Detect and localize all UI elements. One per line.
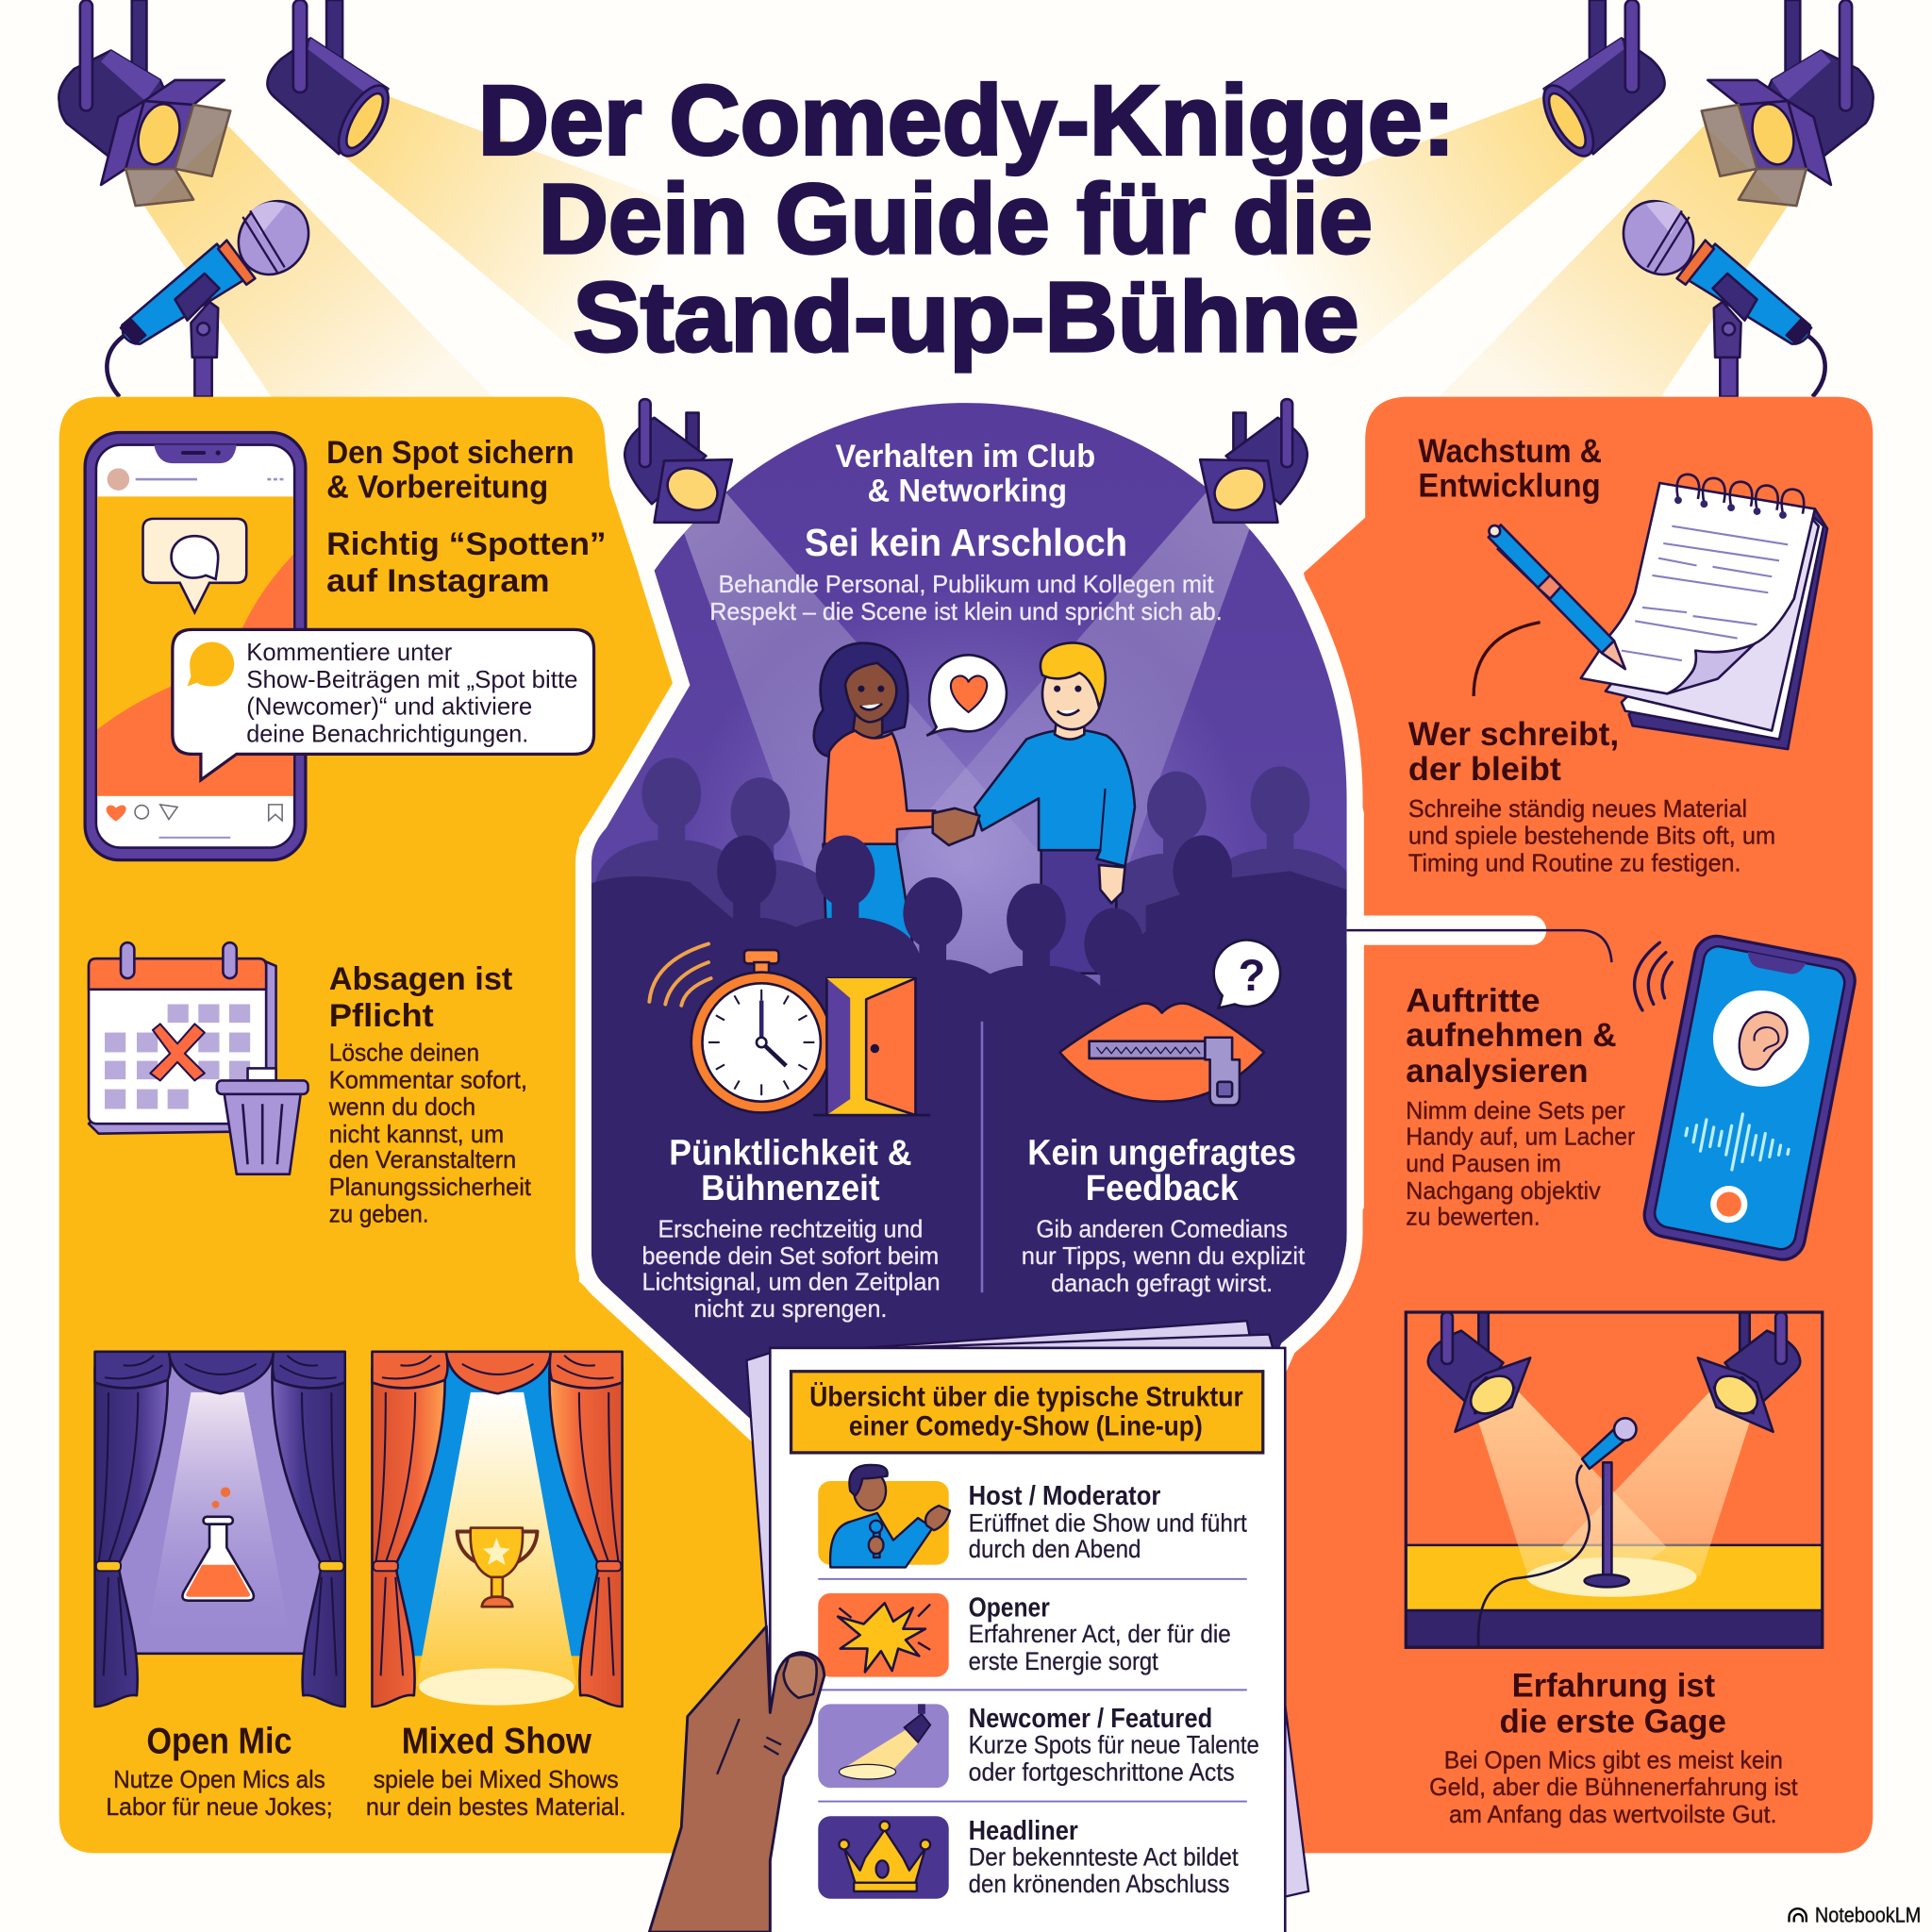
- icon: door: [813, 978, 930, 1115]
- text block: Absagen ist Pflicht: [328, 961, 532, 1228]
- text block: Auftritte aufnehmen & analysieren: zu bewerten.: [1406, 1202, 1541, 1230]
- stage: Mixed Show curtain: [372, 1352, 623, 1707]
- people shaking hands: [814, 642, 1135, 986]
- text block: Sei kein Arschloch: Respekt – die Scene ist klein und spricht sich ab.: [709, 597, 1223, 625]
- heading: Wachstum & Entwicklung: Wachstum &: [1418, 433, 1602, 470]
- text block: Pünktlichkeit & Bühnenzeit: beende dein Set sofort beim: [641, 1241, 939, 1270]
- text block: Open Mic: Open Mic: [146, 1722, 292, 1762]
- handshake: [933, 808, 979, 845]
- callout: comment instruction: Kommentiere unter: [246, 638, 453, 666]
- text block: Absagen ist Pflicht: Pflicht: [329, 998, 434, 1034]
- text block: Absagen ist Pflicht: wenn du doch: [328, 1092, 475, 1121]
- text block: Wer schreibt, der bleibt: Timing und Routine zu festigen.: [1408, 848, 1741, 876]
- text block: Mixed Show: [366, 1722, 626, 1821]
- text block: Pünktlichkeit & Bühnenzeit: nicht zu sprengen.: [693, 1294, 887, 1323]
- line-up paper stack: [747, 1321, 1308, 1932]
- title: [478, 65, 1456, 373]
- text block: Pünktlichkeit & Bühnenzeit: Bühnenzeit: [701, 1169, 880, 1208]
- text block: Auftritte aufnehmen & analysieren: [1406, 982, 1636, 1230]
- row: Opener: erste Energie sorgt: [969, 1647, 1158, 1675]
- title: Stand-up-Bühne: [573, 262, 1359, 373]
- text block: Kein ungefragtes Feedback: Kein ungefragtes: [1027, 1133, 1296, 1173]
- line-up heading: einer Comedy-Show (Line-up): [849, 1411, 1203, 1442]
- text block: Wer schreibt, der bleibt: Wer schreibt,: [1408, 716, 1619, 753]
- callout: comment instruction: deine Benachrichtigungen.: [246, 719, 528, 747]
- row: Opener: Erfahrener Act, der für die: [969, 1620, 1231, 1648]
- row: Headliner: [818, 1816, 1239, 1899]
- line-up heading: Übersicht über die typische Struktur: [809, 1381, 1243, 1412]
- text block: Pünktlichkeit & Bühnenzeit: Lichtsignal, um den Zeitplan: [641, 1268, 941, 1296]
- heading: Richtig Spotten auf Instagram: Richtig “Spotten”: [326, 526, 607, 562]
- icon: zipped lips: [1059, 1004, 1264, 1106]
- text block: Auftritte aufnehmen & analysieren: Nachgang objektiv: [1406, 1176, 1601, 1205]
- icon: calendar with cross: [89, 942, 276, 1134]
- callout: comment instruction: [173, 629, 594, 780]
- text block: Erfahrung ist die erste Gage: Bei Open Mics gibt es meist kein: [1444, 1745, 1783, 1774]
- text block: Open Mic: Labor für neue Jokes;: [106, 1792, 333, 1821]
- text block: Kein ungefragtes Feedback: [1022, 1133, 1306, 1297]
- text block: Mixed Show: Mixed Show: [402, 1722, 591, 1762]
- decorative pen stroke arc: [1474, 623, 1541, 696]
- stage with microphone illustration: [1406, 1312, 1823, 1647]
- text block: Auftritte aufnehmen & analysieren: und Pausen im: [1406, 1149, 1561, 1177]
- text block: Sei kein Arschloch: Behandle Personal, Publikum und Kollegen mit: [718, 570, 1214, 598]
- row: Host / Moderator: [818, 1465, 1247, 1567]
- text block: Absagen ist Pflicht: zu geben.: [329, 1200, 429, 1228]
- icon: microphone on stand: [1478, 1418, 1637, 1647]
- section heading: Verhalten im Club & Networking: [836, 439, 1095, 509]
- text block: Mixed Show: spiele bei Mixed Shows: [374, 1765, 619, 1793]
- text block: Pünktlichkeit & Bühnenzeit: Erscheine rechtzeitig und: [658, 1214, 923, 1242]
- row: Headliner: Headliner: [969, 1816, 1078, 1846]
- icon: question bubble: ?: [1239, 950, 1265, 1000]
- spotlight with barn doors, top left: [58, 0, 230, 206]
- text block: Wer schreibt, der bleibt: und spiele bestehende Bits oft, um: [1408, 822, 1775, 850]
- icon: pen: [1489, 525, 1625, 669]
- text block: Kein ungefragtes Feedback: Gib anderen Comedians: [1036, 1214, 1288, 1242]
- text block: Absagen ist Pflicht: Absagen ist: [329, 961, 512, 997]
- text block: Mixed Show: nur dein bestes Material.: [366, 1792, 626, 1821]
- woman figure: [814, 643, 935, 986]
- text block: Wer schreibt, der bleibt: der bleibt: [1408, 751, 1561, 788]
- text block: Auftritte aufnehmen & analysieren: aufnehmen &: [1406, 1017, 1617, 1054]
- microphone, left: [107, 188, 323, 397]
- line-up heading: [791, 1372, 1263, 1453]
- text block: Open Mic: Nutze Open Mics als: [113, 1765, 325, 1793]
- text block: Kein ungefragtes Feedback: danach gefragt wirst.: [1051, 1269, 1273, 1297]
- logo: NotebookLM: NotebookLM: [1815, 1904, 1921, 1927]
- crowd back row: [595, 758, 1357, 1306]
- text block: Erfahrung ist die erste Gage: Geld, aber die Bühnenerfahrung ist: [1429, 1773, 1798, 1801]
- section heading: Verhalten im Club & Networking: & Networking: [868, 474, 1067, 509]
- heading: Den Spot sichern & Vorbereitung: & Vorbereitung: [326, 470, 548, 506]
- heading: Den Spot sichern & Vorbereitung: [326, 435, 575, 506]
- text block: Pünktlichkeit & Bühnenzeit: [641, 1133, 941, 1323]
- divider between club tips: [981, 1022, 983, 1292]
- text block: Auftritte aufnehmen & analysieren: Auftritte: [1406, 982, 1541, 1019]
- text block: Erfahrung ist die erste Gage: [1429, 1668, 1798, 1828]
- stage: Open Mic curtain: [95, 1352, 345, 1707]
- text block: Erfahrung ist die erste Gage: die erste Gage: [1500, 1703, 1726, 1740]
- text block: Wer schreibt, der bleibt: [1408, 716, 1775, 876]
- icon: trash can: [217, 1068, 308, 1174]
- row: Host / Moderator: Host / Moderator: [969, 1481, 1160, 1511]
- row: Opener: Opener: [969, 1593, 1050, 1624]
- heading: Wachstum & Entwicklung: Entwicklung: [1418, 467, 1601, 504]
- text block: Absagen ist Pflicht: Kommentar sofort,: [329, 1065, 527, 1093]
- panel: yellow background: [59, 397, 770, 1853]
- callout: comment instruction: Show-Beiträgen mit „Spot bitte: [246, 665, 578, 693]
- text block: Sei kein Arschloch: [709, 521, 1223, 625]
- microphone, right: [1609, 188, 1825, 397]
- icon: trophy: [458, 1528, 537, 1607]
- text block: Open Mic: [106, 1722, 333, 1821]
- title: Der Comedy-Knigge:: [478, 65, 1456, 175]
- heading: Wachstum & Entwicklung: [1418, 433, 1602, 504]
- spotlight with barn doors, top right: [1702, 0, 1874, 206]
- text block: Auftritte aufnehmen & analysieren: Handy auf, um Lacher: [1406, 1122, 1636, 1150]
- text block: Erfahrung ist die erste Gage: Erfahrung ist: [1512, 1668, 1715, 1705]
- spotlight, top left inner: [267, 0, 398, 163]
- heading: Richtig Spotten auf Instagram: [326, 526, 607, 599]
- title: Dein Guide für die: [539, 164, 1373, 275]
- club spotlight right: [1200, 399, 1307, 523]
- spotlight beams behind the title: [144, 96, 1788, 407]
- row: Opener: [818, 1593, 1231, 1677]
- row: Newcomer / Featured: oder fortgeschrittone Acts: [969, 1757, 1235, 1786]
- speech bubble with heart: [926, 655, 1007, 736]
- row: Host / Moderator: Erüffnet die Show und führt: [969, 1509, 1247, 1538]
- callout: comment instruction: (Newcomer)“ und aktiviere: [246, 692, 532, 721]
- spotlight, top right inner: [1534, 0, 1665, 163]
- heading: Den Spot sichern & Vorbereitung: Den Spot sichern: [326, 435, 575, 471]
- text block: Erfahrung ist die erste Gage: am Anfang das wertvoilste Gut.: [1449, 1800, 1776, 1828]
- text block: Wer schreibt, der bleibt: Schreihe ständig neues Material: [1408, 794, 1747, 823]
- row: Headliner: Der bekennteste Act bildet: [969, 1842, 1239, 1871]
- icon: phone with Instagram post: [85, 432, 306, 860]
- panel: purple club section: [591, 403, 1357, 1454]
- text block: Auftritte aufnehmen & analysieren: Nimm deine Sets per: [1406, 1096, 1625, 1124]
- text block: Absagen ist Pflicht: Lösche deinen: [329, 1039, 479, 1067]
- text block: Auftritte aufnehmen & analysieren: analysieren: [1406, 1053, 1589, 1090]
- connector bar between club and growth panel: [1347, 915, 1611, 962]
- text block: Absagen ist Pflicht: den Veranstaltern: [329, 1145, 516, 1174]
- row: Newcomer / Featured: Kurze Spots für neue Talente: [969, 1731, 1259, 1759]
- text block: Kein ungefragtes Feedback: nur Tipps, wenn du explizit: [1022, 1241, 1306, 1270]
- panel: orange background: [1281, 397, 1873, 1853]
- section heading: Verhalten im Club & Networking: Verhalten im Club: [836, 439, 1095, 475]
- text block: Absagen ist Pflicht: Planungssicherheit: [329, 1173, 532, 1201]
- club spotlight left: [625, 399, 732, 523]
- text block: Absagen ist Pflicht: nicht kannst, um: [329, 1120, 504, 1148]
- row: Newcomer / Featured: Newcomer / Featured: [969, 1704, 1212, 1734]
- icon: stopwatch: [649, 943, 832, 1112]
- icon: sound waves: [1635, 942, 1672, 1010]
- icon: question bubble: [1214, 941, 1280, 1008]
- text block: Sei kein Arschloch: Sei kein Arschloch: [805, 521, 1127, 564]
- stage light beams in club: [684, 492, 1249, 985]
- text block: Pünktlichkeit & Bühnenzeit: Pünktlichkeit &: [669, 1133, 912, 1173]
- icon: recording phone: [1641, 932, 1858, 1263]
- row: Newcomer / Featured: [818, 1704, 1259, 1788]
- row: Headliner: den krönenden Abschluss: [969, 1870, 1230, 1898]
- icon: flask: [182, 1487, 254, 1601]
- icon: notepad: [1581, 475, 1827, 749]
- man figure: [974, 642, 1135, 974]
- row: Host / Moderator: durch den Abend: [969, 1535, 1141, 1563]
- hand holding the paper: [649, 1626, 824, 1932]
- crowd front row: [591, 836, 1356, 1489]
- text block: Kein ungefragtes Feedback: Feedback: [1086, 1169, 1240, 1208]
- heading: Richtig Spotten auf Instagram: auf Instagram: [326, 563, 550, 599]
